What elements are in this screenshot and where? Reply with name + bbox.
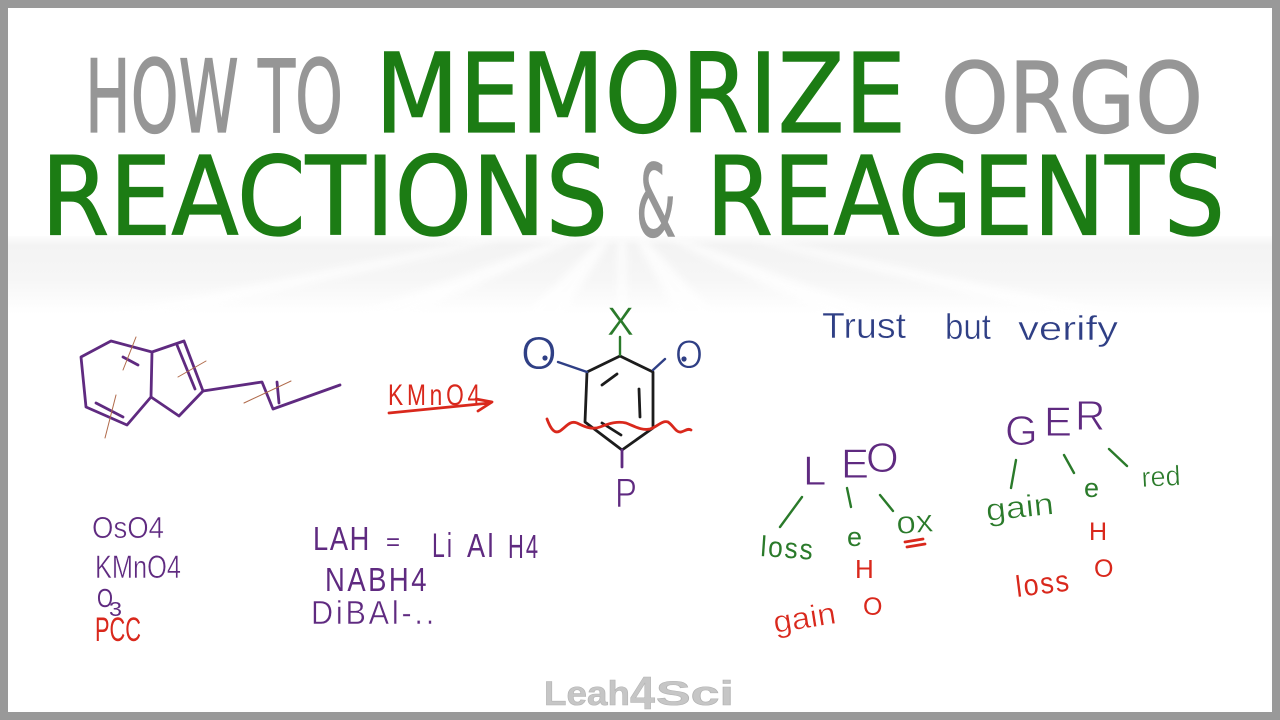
GER loss: loss — [1014, 564, 1072, 604]
reducing reagents list: NABH4 — [325, 561, 429, 598]
substituted benzene — [521, 300, 703, 516]
oxidizing reagents list: O — [97, 583, 113, 613]
GER mnemonic: O — [1094, 555, 1113, 583]
ortho label right: O — [675, 333, 703, 377]
reducing reagents list: = — [386, 529, 400, 556]
X bond — [619, 337, 621, 355]
fused ring alkene molecule — [81, 337, 340, 438]
reaction arrow with KMnO4: KMnO4 — [388, 379, 484, 412]
label X: X — [607, 300, 634, 344]
trust but verify note — [822, 305, 1118, 348]
reducing reagents list: DiBAl-.. — [311, 594, 437, 631]
Leah4Sci logo: Sci — [656, 675, 734, 713]
title word: MEMORIZE: MEMORIZE — [375, 30, 906, 158]
ortho dot left — [542, 355, 548, 361]
LEO gain: gain — [771, 595, 838, 640]
LEO heading: LEO — [803, 434, 899, 494]
GER mnemonic: red — [1141, 460, 1181, 493]
LEO mnemonic: O — [863, 593, 882, 621]
LEO H and O: H — [855, 554, 874, 584]
para bond — [621, 450, 623, 467]
ortho label left: O — [521, 327, 557, 379]
trust but verify note: Trust — [822, 305, 906, 346]
reducing reagents list: Al — [467, 527, 496, 564]
trust but verify note: but — [945, 306, 991, 347]
reducing reagents list: H4 — [508, 528, 540, 565]
oxidizing reagents list — [92, 510, 181, 649]
GER heading: GER — [1005, 392, 1105, 454]
Leah4Sci logo: 4 — [630, 667, 655, 719]
para label: P — [615, 469, 637, 516]
meta wavy cut — [547, 419, 691, 432]
reducing reagents list — [311, 520, 540, 631]
LEO mnemonic: ox — [895, 502, 934, 541]
title word: REAGENTS: REAGENTS — [706, 134, 1225, 260]
GER mnemonic — [984, 392, 1181, 604]
oxidizing reagents list: 3 — [109, 599, 122, 621]
bonds to substituents — [558, 359, 665, 372]
LEO mnemonic: e — [847, 522, 862, 552]
background glow band — [8, 236, 1272, 320]
Leah4Sci logo: Leah — [544, 675, 630, 713]
title word: ampersand: & — [636, 143, 676, 260]
GER H and O: H — [1089, 518, 1107, 546]
GER branches — [1011, 449, 1127, 488]
ortho dot right — [681, 356, 687, 362]
benzene ring — [585, 356, 653, 450]
title word: REACTIONS: REACTIONS — [41, 134, 608, 260]
reducing reagents list: Li — [432, 527, 454, 565]
oxidizing reagents list: OsO4 — [92, 510, 164, 545]
oxidizing reagents list: PCC — [95, 611, 141, 649]
reducing reagents list: LAH — [313, 520, 371, 557]
LEO branches — [780, 488, 893, 527]
title word: HOW TO: HOW TO — [85, 38, 343, 156]
LEO mnemonic — [760, 434, 934, 640]
LEO loss e ox: loss — [760, 531, 816, 567]
oxidizing reagents list: KMnO4 — [95, 549, 181, 585]
title word: ORGO: ORGO — [941, 42, 1203, 155]
trust but verify note: verify — [1018, 310, 1118, 348]
Leah4Sci logo — [544, 667, 734, 719]
GER gain e red: gain — [984, 486, 1055, 528]
GER mnemonic: e — [1084, 473, 1099, 503]
title — [41, 30, 1225, 260]
